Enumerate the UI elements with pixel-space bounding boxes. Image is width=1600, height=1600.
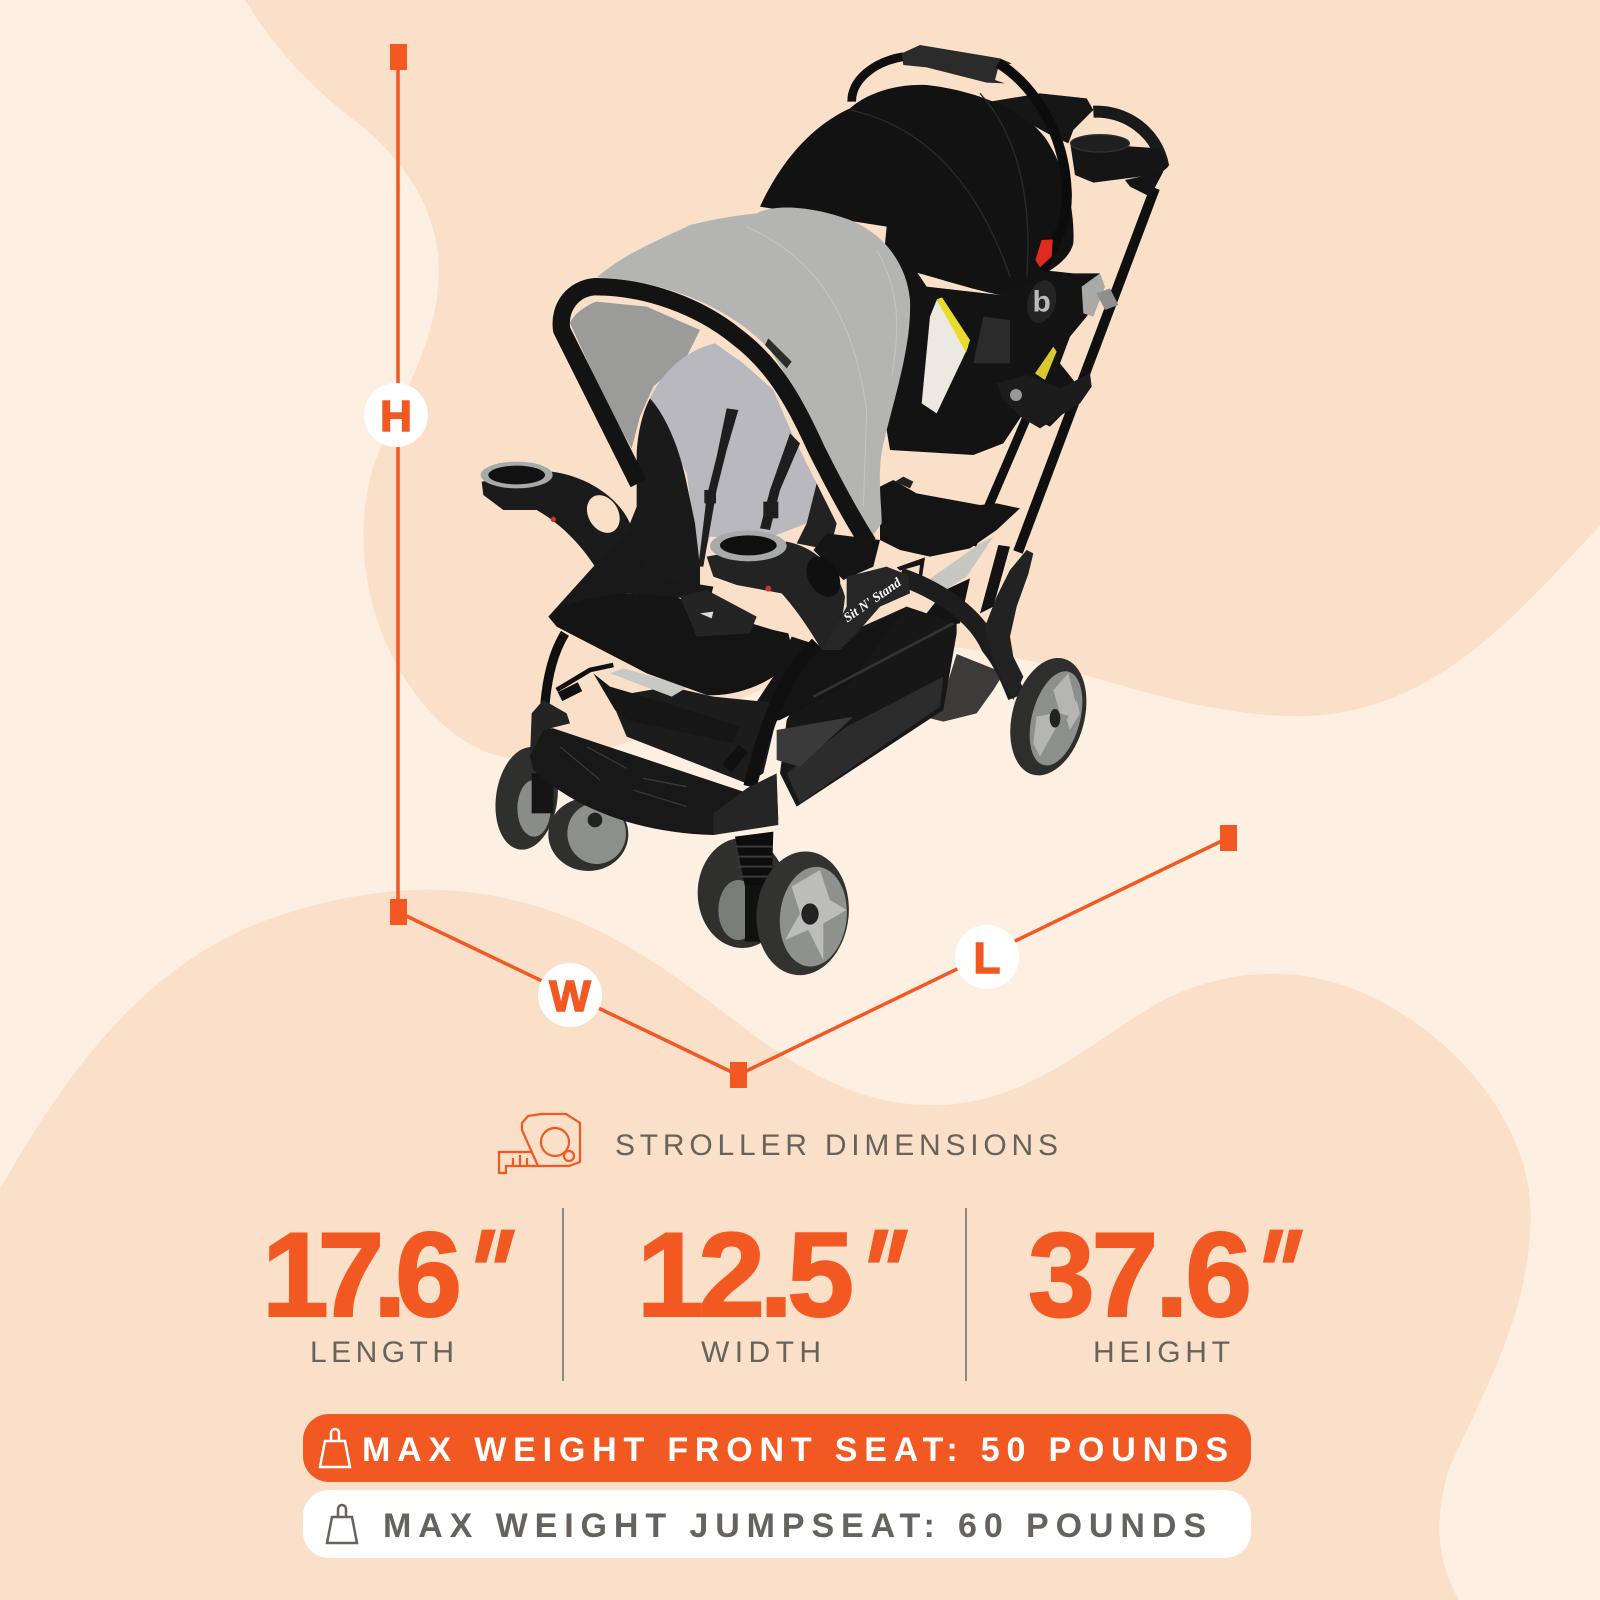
W badge (538, 963, 602, 1027)
chassis logo panel: Sit N' Stand (840, 574, 904, 625)
harness straps (698, 408, 800, 567)
front footrest (530, 700, 778, 835)
seat side panel (597, 398, 837, 590)
length line (738, 825, 1237, 1075)
lower front group (489, 607, 957, 980)
chassis logo panel (823, 567, 910, 650)
L badge (955, 925, 1019, 989)
height line (390, 44, 407, 925)
infant carrier and rear tray (760, 45, 1168, 455)
divider (562, 1208, 564, 1381)
divider (965, 1208, 967, 1381)
jumpseat weight pill (303, 1490, 1251, 1558)
front-left wheels (489, 743, 628, 871)
carrier base: b (1032, 286, 1051, 319)
red release button (1035, 239, 1053, 267)
stat: height (1028, 1204, 1315, 1369)
jump seat (880, 477, 1020, 630)
carrier handle (852, 45, 1067, 270)
chassis side arm (900, 545, 1033, 700)
front seat group (481, 462, 910, 695)
H badge (364, 383, 428, 447)
shopping basket (593, 607, 957, 807)
L badge: L (974, 934, 1000, 983)
carrier canopy (760, 85, 1074, 295)
seat fabric (548, 523, 713, 617)
tape measure icon (499, 1114, 580, 1173)
seat back padding (650, 343, 817, 567)
frame behind right tray (813, 533, 880, 580)
stat: length: 17.6 (262, 1208, 462, 1342)
stat: width: WIDTH (701, 1336, 821, 1369)
rear handlebar and tray (990, 93, 1168, 197)
dimension lines (364, 44, 1237, 1088)
left armrest tray (481, 462, 630, 567)
W badge: W (549, 972, 591, 1021)
front canopy and seat back group (561, 208, 910, 590)
canopy black trim (561, 287, 868, 543)
carrier base (873, 227, 1118, 455)
right armrest tray (707, 531, 847, 650)
stat: width: " (841, 1204, 920, 1343)
heading: STROLLER DIMENSIONS (615, 1129, 1058, 1162)
front-right wheels and spring (698, 832, 855, 980)
stat: width (637, 1204, 920, 1369)
stat: width: 12.5 (637, 1208, 854, 1342)
stat: length (262, 1204, 527, 1369)
rear wheel (998, 649, 1099, 784)
rear frame rails (972, 188, 1155, 552)
stroller illustration (481, 45, 1168, 980)
front seat weight pill: MAX WEIGHT FRONT SEAT: 50 POUNDS (362, 1431, 1228, 1469)
rear chassis group (880, 477, 1099, 784)
canopy seams (747, 227, 897, 507)
width line (398, 912, 747, 1088)
stat: height: " (1236, 1204, 1315, 1343)
stat: length: LENGTH (310, 1336, 454, 1369)
stat: length: " (448, 1204, 527, 1343)
front frame legs (545, 633, 817, 787)
H badge: H (380, 392, 412, 441)
front seat weight pill (303, 1414, 1251, 1482)
seat cushion (548, 590, 792, 695)
brand tag (765, 338, 792, 368)
rear platform (923, 654, 1002, 722)
jumpseat weight pill: MAX WEIGHT JUMPSEAT: 60 POUNDS (383, 1507, 1206, 1545)
stat: height: HEIGHT (1093, 1336, 1230, 1369)
front canopy (597, 208, 910, 535)
inner canopy (570, 302, 700, 448)
stat: height: 37.6 (1028, 1208, 1252, 1342)
